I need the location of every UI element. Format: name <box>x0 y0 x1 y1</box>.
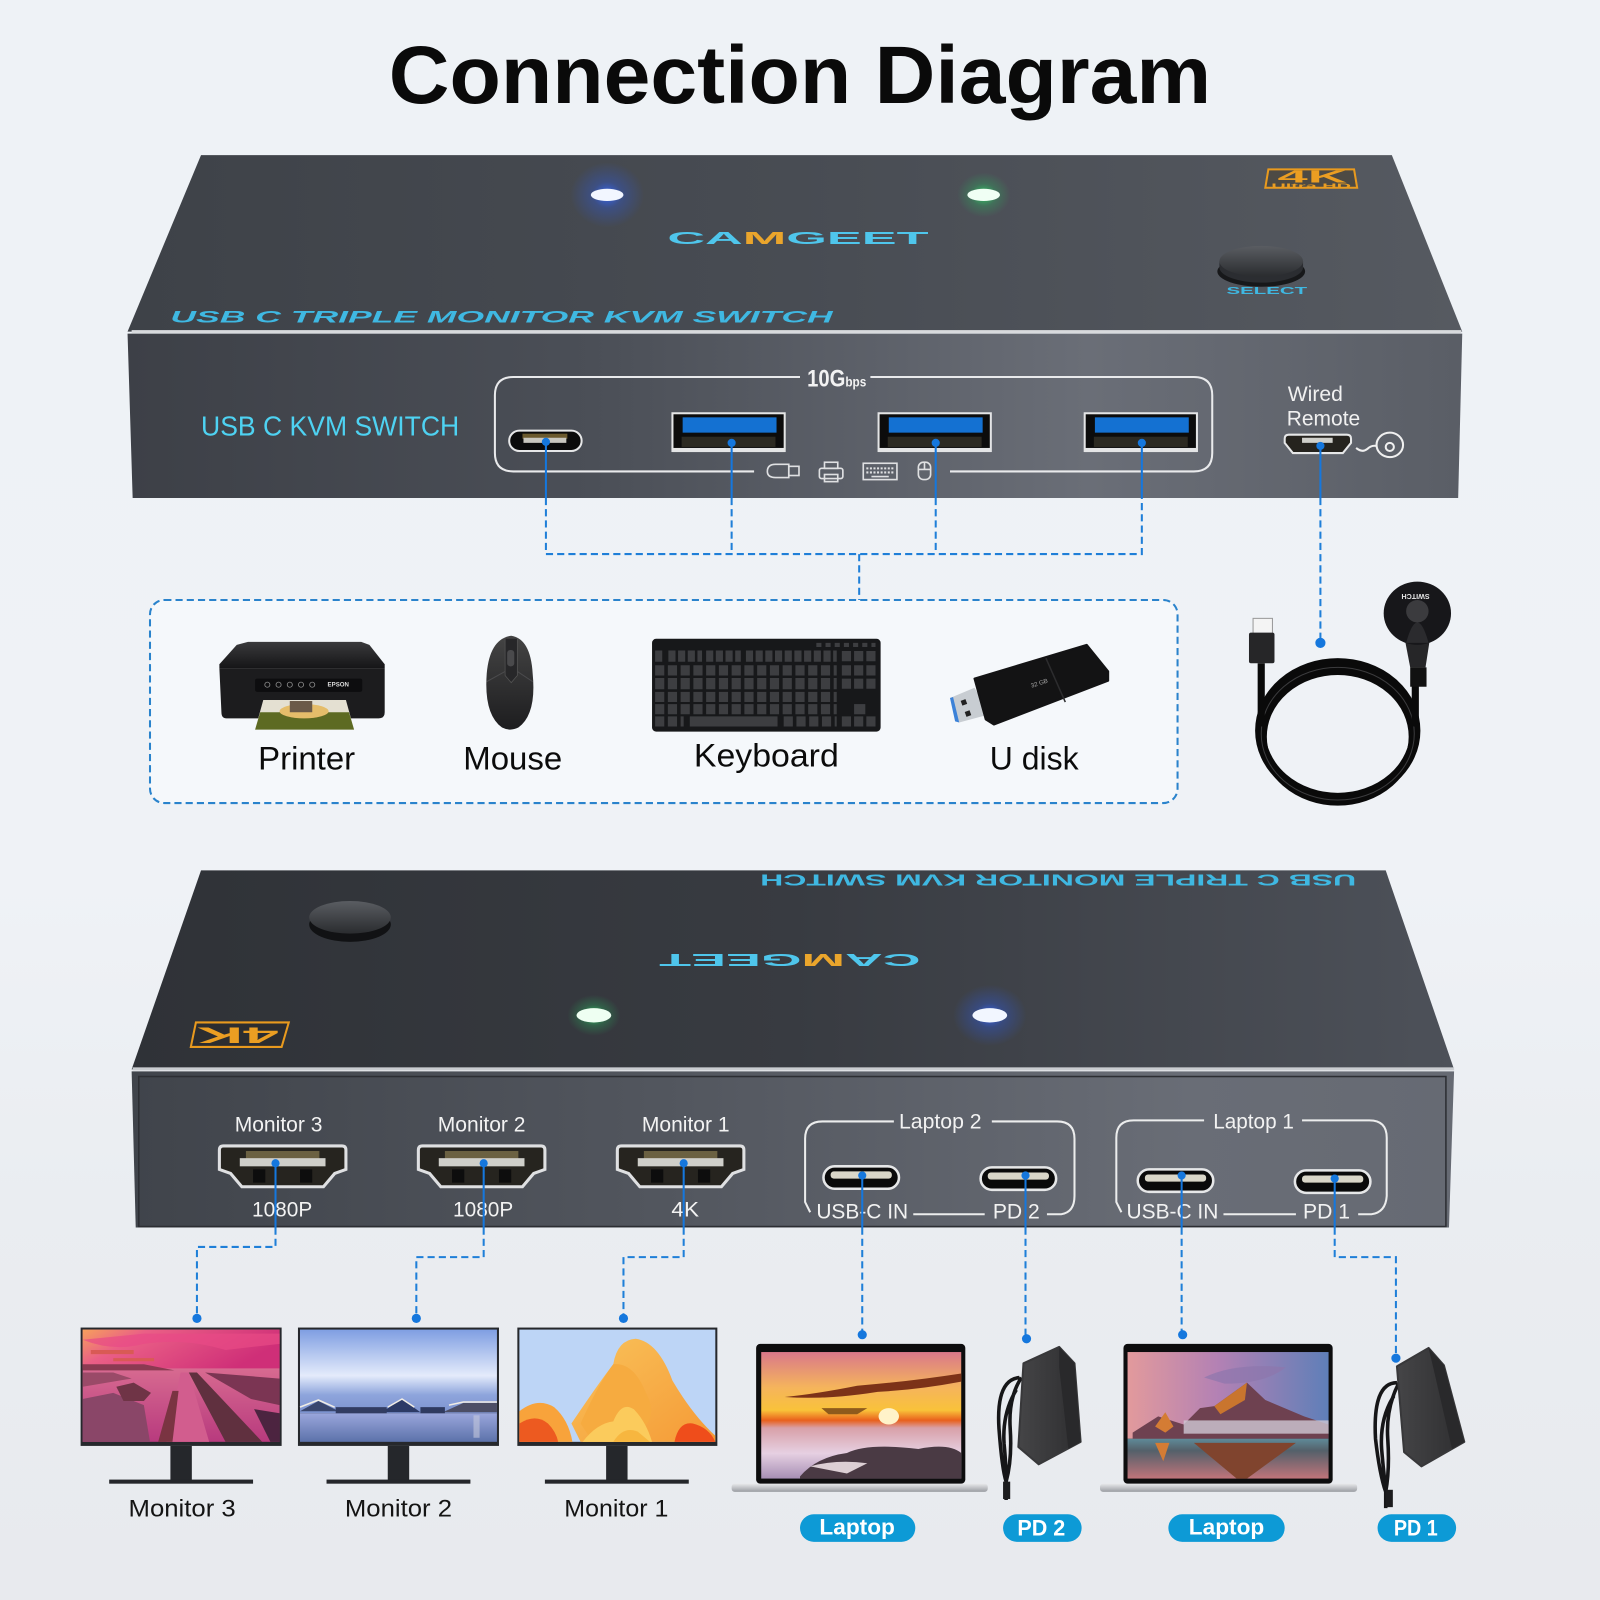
front panel inset <box>139 1077 1446 1227</box>
charger cord <box>1375 1383 1399 1508</box>
group outline <box>1116 1120 1387 1214</box>
USB-C in port <box>823 1166 899 1189</box>
monitor port labels: Monitor 1 <box>642 1113 730 1137</box>
monitor 2 label: Monitor 2 <box>345 1495 452 1522</box>
top face <box>132 870 1454 1069</box>
knob <box>309 901 391 942</box>
icon: printer <box>819 462 843 482</box>
remote puck <box>1384 582 1451 687</box>
port names <box>1127 1199 1350 1223</box>
connector lines: USB ports to peripherals <box>542 438 1326 648</box>
icon: usb drive <box>767 464 799 478</box>
screen: sunset over sea <box>761 1352 961 1479</box>
screen: pink sunset rocks <box>83 1330 280 1442</box>
port names: USB-C IN <box>816 1199 908 1223</box>
remote puck: SWITCH <box>1401 592 1430 600</box>
pill: laptop B: Laptop <box>1189 1515 1264 1540</box>
pill: PD 2 <box>1003 1514 1082 1542</box>
peripheral icons row <box>767 462 931 482</box>
HDMI port 3 <box>219 1146 346 1187</box>
resolution labels: 4K <box>671 1197 700 1221</box>
HDMI port 1 <box>617 1146 744 1187</box>
monitor port labels: Monitor 3 <box>235 1113 322 1137</box>
charger body <box>1018 1347 1081 1464</box>
screen: mountain lake <box>1128 1352 1329 1479</box>
wired remote label: Wired <box>1288 382 1343 406</box>
4K badge <box>1265 167 1357 190</box>
USB port group outline <box>495 377 1212 471</box>
dashed panel frame <box>150 600 1178 803</box>
laptop 1 port group <box>1116 1110 1387 1223</box>
monitor 2 <box>298 1328 499 1484</box>
title: Connection Diagram <box>389 30 1211 121</box>
4K badge: Ultra HD <box>1271 183 1353 190</box>
10Gbps label: 10Gbps <box>807 366 866 393</box>
laptop A <box>732 1344 988 1492</box>
pill: laptop A <box>800 1514 915 1542</box>
charger plug <box>1386 1490 1393 1507</box>
top device: USB hub side <box>128 155 1462 498</box>
edge highlight <box>133 1067 1454 1070</box>
panel: peripherals <box>150 600 1178 803</box>
group outline <box>805 1121 1074 1214</box>
connector lines: ports to monitors, laptops and chargers <box>192 1159 1401 1363</box>
charger cord <box>999 1378 1021 1500</box>
edge highlight <box>132 330 1461 333</box>
monitor port labels: Monitor 2 <box>438 1113 526 1137</box>
pill: laptop A: Laptop <box>819 1515 895 1540</box>
monitor stand <box>545 1446 689 1484</box>
port names: PD 1 <box>1303 1199 1350 1223</box>
LED 1 blue <box>953 985 1027 1046</box>
PD port <box>981 1167 1056 1190</box>
wired remote cable <box>1249 582 1451 802</box>
resolution labels <box>252 1197 700 1221</box>
port names <box>816 1199 1040 1223</box>
mouse label: Mouse <box>463 739 562 776</box>
USB-C port <box>509 431 582 451</box>
monitor stand <box>109 1446 253 1484</box>
USB-C plug <box>1249 618 1274 663</box>
monitor port labels <box>235 1113 730 1137</box>
select knob <box>1217 246 1305 287</box>
charger PD 1 <box>1375 1348 1464 1508</box>
monitor 3 label: Monitor 3 <box>129 1495 236 1522</box>
pill: laptop B <box>1168 1514 1285 1542</box>
monitor frame <box>517 1328 717 1446</box>
LED 2 green <box>957 172 1010 217</box>
product line text: USB C TRIPLE MONITOR KVM SWITCH <box>170 308 835 326</box>
front label: USB C KVM SWITCH <box>201 411 459 442</box>
laptop B <box>1100 1344 1357 1492</box>
icon: keyboard <box>863 463 897 480</box>
cable loop <box>1260 663 1415 802</box>
screen: orange abstract <box>519 1330 715 1442</box>
USB-A port 1 <box>672 413 785 452</box>
front face <box>132 1071 1454 1228</box>
port names: PD 2 <box>993 1199 1040 1223</box>
printer image: EPSON <box>328 682 349 689</box>
icon: remote knob <box>1356 433 1403 457</box>
printer image <box>219 642 385 730</box>
group label: Laptop 1 <box>1213 1110 1294 1134</box>
laptop lid <box>756 1344 965 1484</box>
top face <box>128 155 1462 332</box>
monitor frame <box>298 1328 499 1446</box>
bottom device: host side <box>132 870 1454 1228</box>
USB-C in port <box>1138 1169 1213 1192</box>
wired remote label <box>1287 382 1360 431</box>
icon: mouse <box>918 462 931 480</box>
printer label: Printer <box>258 739 355 776</box>
brand logo: CA M GEET <box>667 228 930 248</box>
pill: PD 2: PD 2 <box>1017 1516 1065 1541</box>
keyboard image <box>652 639 881 732</box>
USB-A port 2 <box>879 413 991 452</box>
wired remote label: Remote <box>1287 407 1360 431</box>
LED 1 blue <box>570 162 644 228</box>
select label: SELECT <box>1227 286 1309 297</box>
HDMI port 2 <box>418 1146 545 1187</box>
USB-A port 3 <box>1085 413 1197 452</box>
front face <box>128 334 1462 498</box>
charger PD 2 <box>999 1347 1081 1500</box>
USB disk image: 32 GB <box>1030 678 1049 690</box>
group label: Laptop 2 <box>899 1110 982 1134</box>
resolution labels: 1080P <box>453 1197 513 1221</box>
keyboard label: Keyboard <box>694 736 839 773</box>
pill: PD 1: PD 1 <box>1394 1516 1438 1541</box>
pill: PD 1 <box>1378 1514 1456 1542</box>
port names: USB-C IN <box>1127 1199 1218 1223</box>
LED 2 green <box>567 995 620 1036</box>
charger body <box>1397 1348 1464 1466</box>
monitor 1 <box>517 1328 717 1484</box>
mouse image <box>486 636 533 730</box>
laptop 2 port group <box>805 1110 1074 1223</box>
reversed 4K badge <box>191 1022 289 1048</box>
U disk label: U disk <box>990 739 1079 776</box>
reversed brand logo: CAMGEET <box>658 950 920 970</box>
charger plug <box>1003 1482 1010 1499</box>
USB disk image <box>950 645 1108 724</box>
monitor frame <box>81 1328 282 1446</box>
reversed 4K badge: 4K <box>197 1023 279 1048</box>
PD port <box>1295 1170 1370 1193</box>
laptop base <box>732 1484 988 1492</box>
micro port <box>1285 435 1351 453</box>
4K badge: 4K <box>1278 167 1348 187</box>
laptop base <box>1100 1484 1357 1492</box>
laptop lid <box>1123 1344 1333 1484</box>
monitor stand <box>327 1446 470 1484</box>
resolution labels: 1080P <box>252 1197 312 1221</box>
screen: lake pyramids <box>300 1330 497 1442</box>
reversed product line text: USB C TRIPLE MONITOR KVM SWITCH <box>760 870 1356 887</box>
monitor 1 label: Monitor 1 <box>564 1495 668 1522</box>
monitor 3 <box>81 1328 282 1484</box>
